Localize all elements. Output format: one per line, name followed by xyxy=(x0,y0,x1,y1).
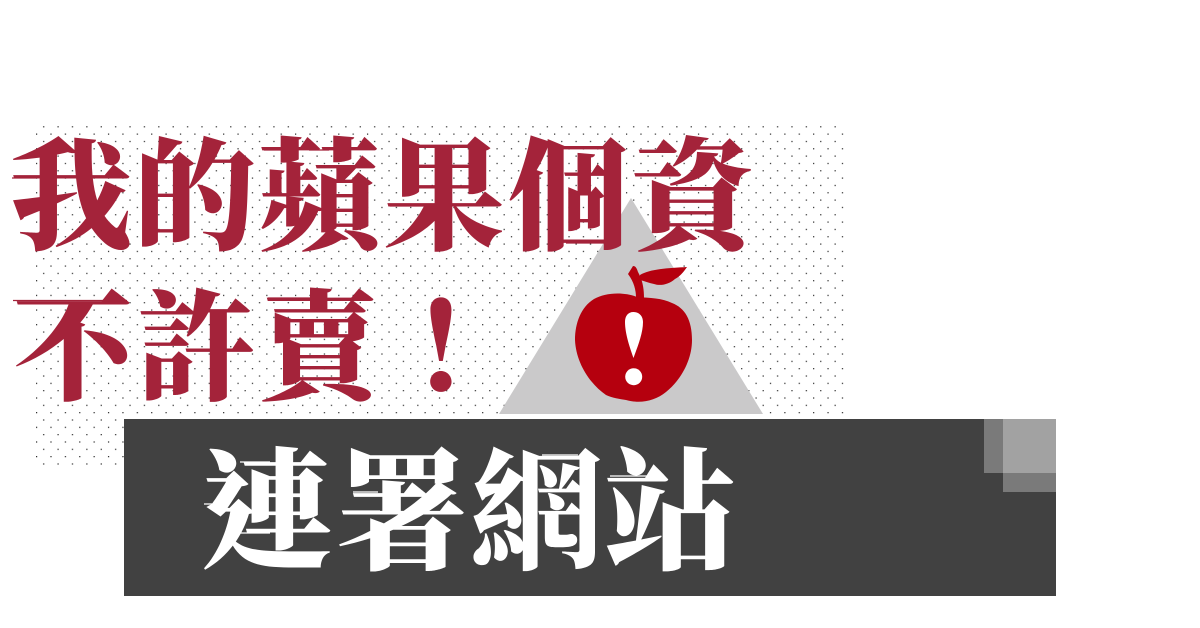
dotted background panel xyxy=(34,126,844,468)
headline line 1: 我的蘋果個資 xyxy=(10,132,763,267)
banner corner squares xyxy=(984,419,1056,492)
apple leaf xyxy=(640,267,687,285)
dark banner xyxy=(124,419,1056,596)
icon: apple with exclamation mark xyxy=(575,266,692,402)
warning triangle xyxy=(499,198,763,414)
banner title: 連署網站 xyxy=(201,441,736,588)
apple body xyxy=(575,293,692,402)
exclamation mark xyxy=(625,312,643,385)
headline line 2: 不許賣！ xyxy=(13,283,501,416)
apple stem xyxy=(628,266,644,298)
